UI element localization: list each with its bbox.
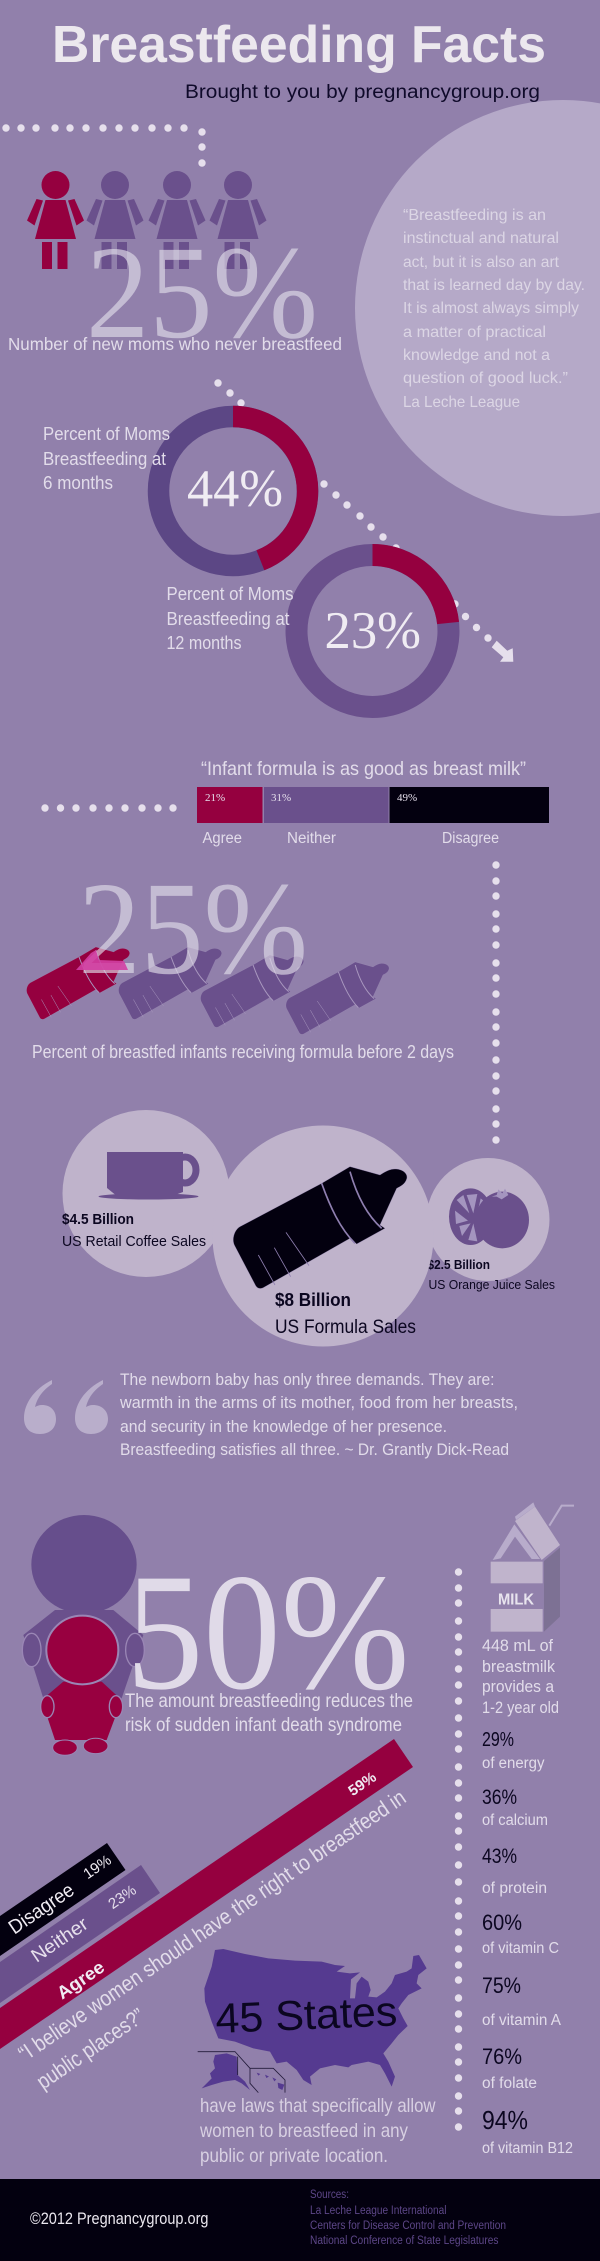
highlight: numeral over red bottle (76, 950, 128, 970)
panel: orange juice sales (426, 1158, 555, 1292)
panel: orange juice sales: $2.5 Billion (428, 1258, 490, 1272)
icon: mother and baby (22, 1515, 144, 1755)
dotted connector: right vertical (492, 861, 500, 1144)
dotted connector: through rings (214, 379, 492, 642)
sources: National Conference of State Legislatures (310, 2235, 499, 2247)
dotted connector: left of bar (41, 804, 177, 812)
diagonal bar chart: public breastfeeding: 59% (345, 1769, 380, 1800)
quote: La Leche League: question of good luck.” (403, 370, 568, 387)
dotted connector: top (2, 124, 206, 167)
icon: milk carton: MILK (498, 1591, 534, 1608)
stacked bar chart: formula opinion: Disagree (442, 830, 499, 847)
caption: 12 months: Breastfeeding at (166, 609, 290, 629)
panel: coffee sales (62, 1110, 230, 1277)
list: nutrient percentages: of protein (482, 1880, 547, 1897)
text: state laws: women to breastfeed in any (199, 2120, 408, 2142)
list: nutrient percentages: of vitamin B12 (482, 2140, 573, 2157)
list: nutrient percentages: of vitamin C (482, 1940, 559, 1957)
text: state laws (199, 2095, 436, 2167)
arrow (492, 641, 513, 662)
caption: 12 months: Percent of Moms (166, 584, 294, 604)
icons: four women (27, 171, 266, 269)
diagonal bar chart: public breastfeeding (0, 1739, 413, 2049)
caption: 12 months (166, 584, 294, 653)
icon: black bottle (233, 1167, 407, 1288)
icon: milk carton (491, 1502, 574, 1632)
diagonal bar chart: public breastfeeding: Neither (28, 1913, 93, 1967)
quote: La Leche League: instinctual and natural (403, 230, 559, 247)
sources: La Leche League International (310, 2205, 446, 2217)
caption: SIDS: risk of sudden infant death syndrome (125, 1715, 402, 1736)
list: nutrient percentages: of vitamin A (482, 2012, 562, 2029)
caption: 12 months: 12 months (166, 633, 242, 653)
stacked bar chart: formula opinion: Agree (202, 830, 242, 847)
quote: La Leche League: that is learned day by day. (403, 277, 585, 294)
text: breastmilk provides: 448 mL of (482, 1636, 553, 1655)
list: nutrient percentages: 29% (482, 1729, 514, 1751)
list: nutrient percentages: 76% (482, 2044, 522, 2069)
caption: number of new moms: Number of new moms who never breastfeed (8, 334, 342, 354)
icon: orange (449, 1188, 529, 1248)
list: nutrient percentages: 75% (482, 1973, 521, 1998)
dotted connector: nutrient column (455, 1568, 462, 2131)
donut chart: 44% at 6 months (158, 416, 308, 566)
caption: SIDS: The amount breastfeeding reduces the (125, 1691, 413, 1712)
icon: quotation marks (24, 1380, 108, 1434)
heading: 45 States: 45 States (214, 1987, 398, 2042)
diagonal bar chart: public breastfeeding: 19% (80, 1852, 115, 1883)
caption: 6 months: Breastfeeding at (43, 449, 166, 469)
donut chart: 23% at 12 months (296, 555, 448, 707)
copyright: ©2012 Pregnancygroup.org (30, 2209, 208, 2228)
text: state laws: public or private location. (200, 2145, 388, 2167)
list: nutrient percentages: 94% (482, 2105, 528, 2135)
caption: SIDS (125, 1691, 413, 1736)
subtitle: Brought to you by pregnancygroup.org (185, 82, 540, 103)
stacked bar chart: formula opinion: 31% (271, 792, 291, 804)
quote: Dr. Grantly Dick-Read: The newborn baby has only three demands. They are: (120, 1370, 494, 1389)
quote circle (355, 100, 600, 516)
sources: Centers for Disease Control and Prevention (310, 2220, 506, 2232)
icon: coffee cup (98, 1152, 198, 1200)
title: Breastfeeding Facts (52, 16, 546, 74)
text: breastmilk provides (482, 1636, 559, 1717)
panel: coffee sales: $4.5 Billion (62, 1212, 134, 1228)
quote: Dr. Grantly Dick-Read: Breastfeeding satisfies all three. ~ Dr. Grantly Dick-Read (120, 1440, 509, 1459)
list: nutrient percentages (482, 1729, 573, 2157)
diagonal bar chart: public breastfeeding: Disagree (5, 1879, 78, 1939)
list: nutrient percentages: of calcium (482, 1812, 548, 1829)
quote: La Leche League: “Breastfeeding is an (403, 207, 546, 224)
list: nutrient percentages: 36% (482, 1786, 517, 1809)
panel: formula sales: $8 Billion (275, 1290, 351, 1310)
footer (0, 2179, 600, 2261)
heading: infant formula: “Infant formula is as good as breast milk” (201, 758, 526, 780)
stacked bar chart: formula opinion: 49% (397, 792, 417, 804)
caption: formula before 2 days: Percent of breastfed infants receiving formula before 2 days (32, 1042, 454, 1062)
panel: formula sales: US Formula Sales (275, 1317, 416, 1338)
panel: coffee sales: US Retail Coffee Sales (62, 1233, 206, 1250)
panel: orange juice sales: US Orange Juice Sales (428, 1277, 555, 1292)
diagonal statement: right to breastfeed: “I believe women should have the right to breastfeed in (14, 1785, 410, 2066)
text: breastmilk provides: provides a (482, 1677, 554, 1696)
donut chart: 44% at 6 months: 44% (187, 460, 283, 518)
diagonal bar chart: public breastfeeding: 23% (105, 1882, 140, 1913)
map: United States (198, 1949, 427, 2093)
quote: La Leche League: It is almost always simply (403, 300, 579, 317)
quote: La Leche League: act, but it is also an art (403, 254, 560, 271)
text: state laws: have laws that specifically allow (200, 2095, 436, 2117)
sources: Sources: (310, 2189, 349, 2201)
quote: Dr. Grantly Dick-Read: warmth in the arms of its mother, food from her breasts, (119, 1393, 518, 1412)
diagonal bar chart: public breastfeeding: Agree (53, 1957, 108, 2003)
quote: La Leche League (403, 207, 585, 411)
caption: 6 months (43, 424, 170, 493)
list: nutrient percentages: of energy (482, 1755, 545, 1772)
quote: La Leche League: La Leche League (403, 394, 520, 411)
text: breastmilk provides: 1-2 year old (482, 1698, 559, 1717)
quote: La Leche League: a matter of practical (403, 324, 546, 341)
stat: 25% receiving formula: 25% (78, 854, 308, 1002)
donut chart: 23% at 12 months: 23% (324, 602, 421, 660)
panel: formula sales (212, 1126, 434, 1346)
quote: Dr. Grantly Dick-Read (119, 1370, 518, 1459)
stacked bar chart: formula opinion: 21% (205, 792, 225, 804)
list: nutrient percentages: 60% (482, 1910, 522, 1935)
stat: 25% never breastfeed: 25% (86, 218, 318, 366)
quote: Dr. Grantly Dick-Read: and security in the knowledge of her presence. (120, 1417, 447, 1436)
caption: 6 months: 6 months (43, 473, 113, 493)
list: nutrient percentages: 43% (482, 1845, 517, 1868)
stacked bar chart: formula opinion (197, 787, 549, 847)
sources (310, 2189, 506, 2247)
stacked bar chart: formula opinion: Neither (287, 830, 336, 847)
quote: La Leche League: knowledge and not a (403, 347, 550, 364)
stat: 50%: 50% (126, 1540, 410, 1725)
list: nutrient percentages: of folate (482, 2075, 537, 2092)
diagonal statement: right to breastfeed: public places?” (32, 2003, 149, 2094)
icons: four bottles (27, 947, 389, 1034)
caption: 6 months: Percent of Moms (43, 424, 170, 444)
text: breastmilk provides: breastmilk (482, 1657, 555, 1676)
